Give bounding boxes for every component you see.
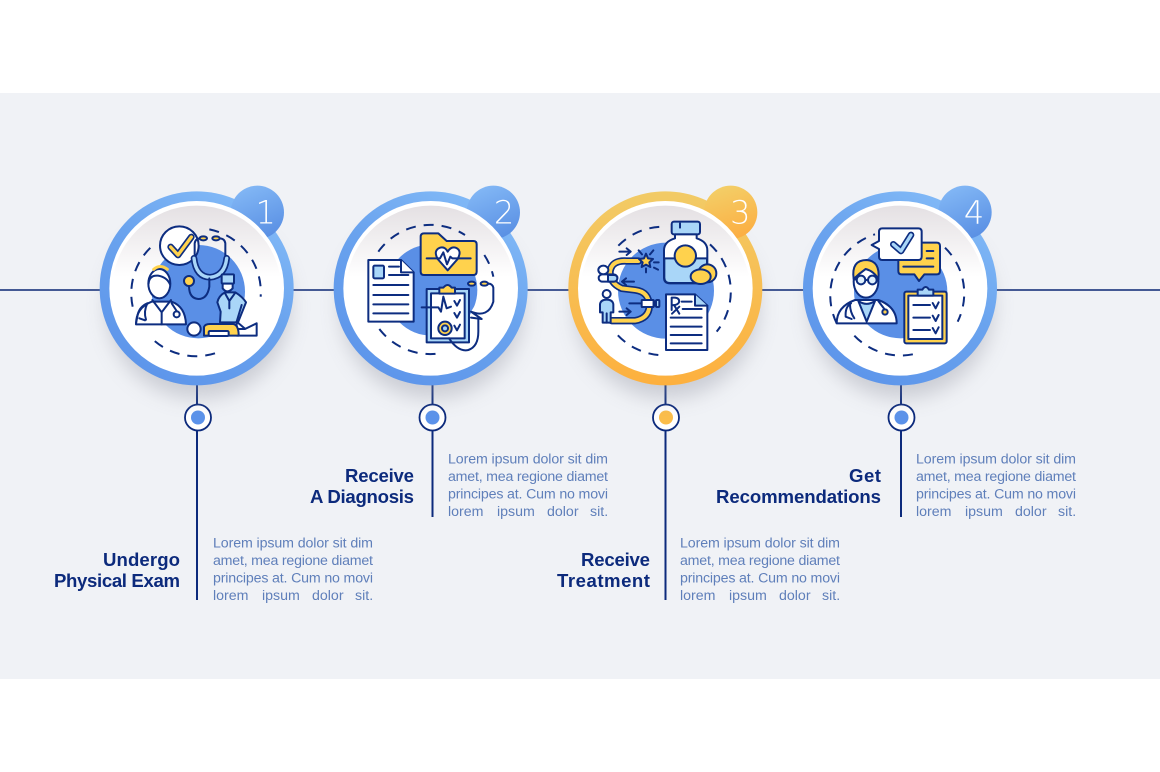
text block 1: dolor: [312, 588, 344, 604]
text block 1: sit.: [355, 588, 373, 604]
step 4 circle: [803, 186, 997, 398]
badge 4: 4: [964, 194, 984, 232]
title: Get Recommendations: Recommendations: [716, 486, 881, 507]
text block 2: lorem: [448, 504, 483, 520]
title: Receive A Diagnosis: Receive: [345, 465, 414, 486]
title: Receive A Diagnosis: [310, 465, 414, 507]
text block 3: principes at. Cum no movi: [680, 570, 840, 586]
text block 4: lorem: [916, 504, 951, 520]
title: Receive Treatment: [557, 549, 650, 591]
step 4 connector and node: [888, 380, 914, 517]
text block 2: ipsum: [497, 504, 535, 520]
badge 2: 2: [494, 194, 514, 232]
text block 4: dolor: [1015, 504, 1047, 520]
text block 2: sit.: [590, 504, 608, 520]
text block 1: lorem: [213, 588, 248, 604]
text block 2: principes at. Cum no movi: [448, 486, 608, 502]
title: Get Recommendations: Get: [849, 465, 881, 486]
icon: doctors and stethoscope: [131, 226, 261, 356]
text block 3: lorem: [680, 588, 715, 604]
step 1 connector and node: [185, 380, 211, 600]
text block 1: amet, mea regione diamet: [213, 553, 373, 569]
text block 3: amet, mea regione diamet: [680, 553, 840, 569]
step 1 circle: [100, 186, 294, 398]
text block 4: amet, mea regione diamet: [916, 469, 1076, 485]
title: Undergo Physical Exam: [54, 549, 180, 591]
text block 2: [448, 452, 608, 520]
title: Undergo Physical Exam: Physical Exam: [54, 570, 180, 591]
badge 3: 3: [730, 194, 751, 232]
text block 4: principes at. Cum no movi: [916, 486, 1076, 502]
text block 2: dolor: [547, 504, 579, 520]
text block 1: principes at. Cum no movi: [213, 570, 373, 586]
badge 1: [231, 186, 284, 239]
badge 2: [467, 186, 520, 239]
text block 3: dolor: [779, 588, 811, 604]
title: Undergo Physical Exam: Undergo: [103, 549, 180, 570]
step 3 connector and node: [653, 380, 679, 600]
title: Get Recommendations: [716, 465, 881, 507]
icon: medical documents: [368, 225, 493, 354]
badge 1: 1: [255, 194, 276, 232]
background panel: [0, 93, 1160, 679]
text block 3: ipsum: [729, 588, 767, 604]
text block 4: [916, 452, 1076, 520]
icon: treatment pathway: [598, 222, 731, 355]
badge 3: [704, 186, 757, 239]
text block 4: Lorem ipsum dolor sit dim: [916, 452, 1076, 468]
horizontal timeline: [0, 289, 1160, 291]
step 2 circle: [334, 186, 528, 398]
text block 4: sit.: [1058, 504, 1076, 520]
text block 1: Lorem ipsum dolor sit dim: [213, 536, 373, 552]
title: Receive Treatment: Treatment: [557, 570, 650, 591]
text block 4: ipsum: [965, 504, 1003, 520]
text block 2: amet, mea regione diamet: [448, 469, 608, 485]
text block 3: sit.: [822, 588, 840, 604]
text block 1: ipsum: [262, 588, 300, 604]
text block 1: [213, 536, 373, 604]
text block 2: Lorem ipsum dolor sit dim: [448, 452, 608, 468]
step 2 connector and node: [420, 380, 446, 517]
title: Receive Treatment: Receive: [581, 549, 650, 570]
badge 4: [938, 186, 992, 239]
title: Receive A Diagnosis: A Diagnosis: [310, 486, 414, 507]
icon: doctor recommendations: [830, 228, 964, 355]
step 3 circle: [568, 186, 762, 398]
text block 3: Lorem ipsum dolor sit dim: [680, 536, 840, 552]
text block 3: [680, 536, 840, 604]
